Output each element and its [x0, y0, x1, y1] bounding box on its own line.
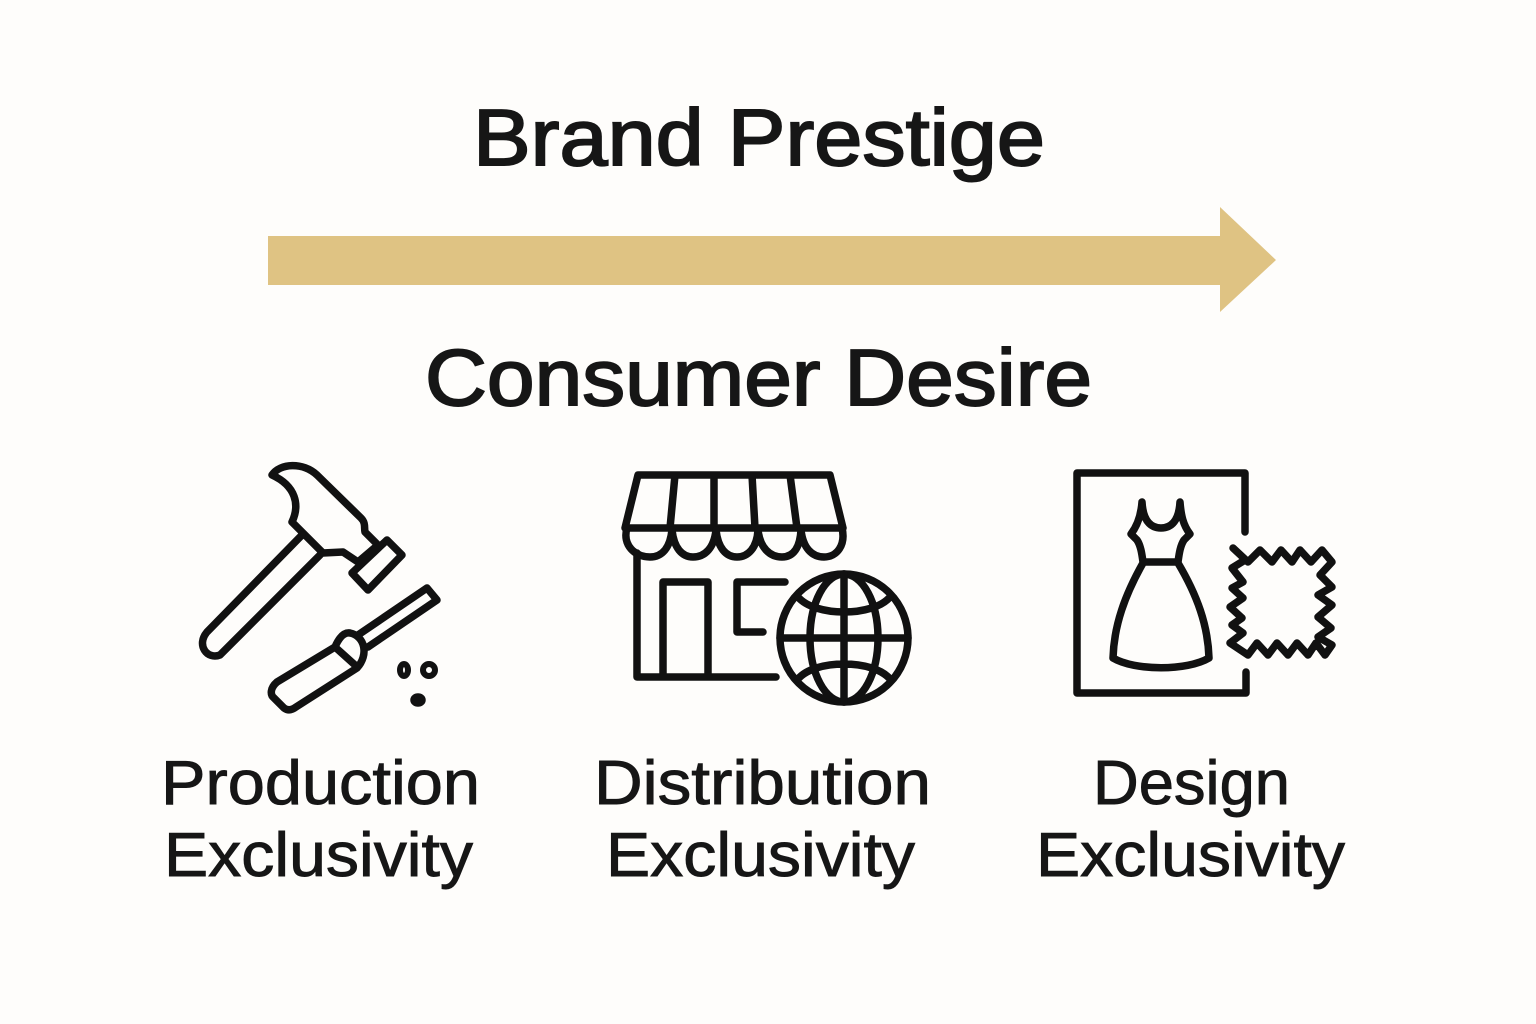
heading: Brand Prestige: Brand Prestige — [473, 93, 1045, 182]
label: Production Exclusivity: Production — [161, 749, 480, 818]
chisel — [271, 588, 437, 710]
icon: dress sketch with fabric swatch — [1077, 473, 1332, 693]
hammer handle — [202, 535, 320, 656]
label: Production Exclusivity: Exclusivity — [164, 821, 473, 890]
hammer face — [352, 540, 402, 590]
label: Distribution Exclusivity: Distribution — [594, 749, 931, 818]
shop wall and door — [637, 553, 776, 677]
label: Design Exclusivity: Exclusivity — [1036, 821, 1345, 890]
hammer head — [272, 466, 378, 562]
icon: storefront with globe — [625, 475, 908, 702]
fabric swatch — [1230, 548, 1332, 655]
awning — [625, 475, 843, 528]
dress — [1113, 502, 1209, 668]
icon: hammer and chisel — [202, 466, 437, 710]
label: Production Exclusivity — [161, 749, 480, 890]
window — [737, 582, 785, 632]
sketch frame — [1077, 473, 1246, 693]
label: Design Exclusivity: Design — [1093, 749, 1290, 818]
label: Distribution Exclusivity: Exclusivity — [606, 821, 915, 890]
globe — [780, 574, 908, 702]
arrow: gold arrow pointing right — [268, 207, 1276, 312]
label: Design Exclusivity — [1036, 749, 1345, 890]
awning scallops — [626, 528, 843, 557]
label: Distribution Exclusivity — [594, 749, 931, 890]
chips — [400, 664, 408, 676]
heading: Consumer Desire: Consumer Desire — [425, 333, 1092, 422]
